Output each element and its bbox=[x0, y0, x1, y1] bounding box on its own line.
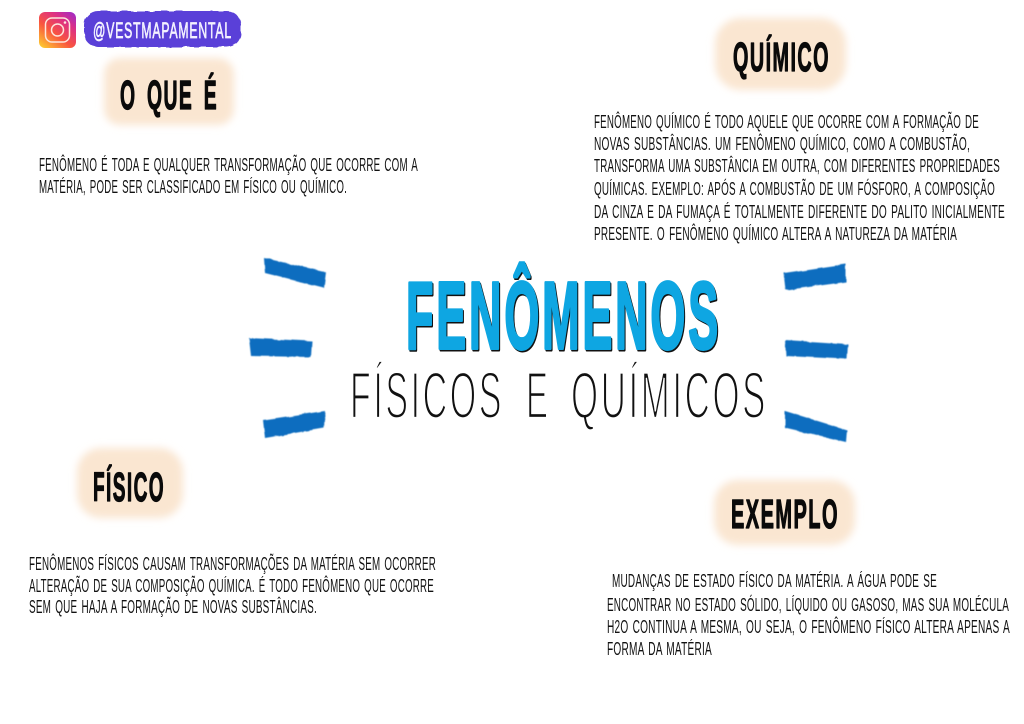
panel: químico bbox=[594, 18, 1005, 244]
text block: o que é: MATÉRIA, PODE SER CLASSIFICADO EM FÍSICO OU QUÍMICO. bbox=[39, 177, 347, 197]
icon: instagram bbox=[39, 12, 76, 48]
instagram handle badge: @VESTMAPAMENTAL bbox=[93, 18, 232, 43]
brush strokes left bbox=[249, 258, 326, 438]
heading: o que é: O QUE É bbox=[120, 72, 218, 118]
text block: físico: SEM QUE HAJA A FORMAÇÃO DE NOVAS SUBSTÂNCIAS. bbox=[29, 596, 317, 617]
panel: o que é bbox=[39, 58, 418, 197]
instagram handle badge bbox=[84, 11, 241, 47]
heading: exemplo: EXEMPLO bbox=[731, 491, 839, 537]
text block: o que é: FENÔMENO É TODA E QUALQUER TRANSFORMAÇÃO QUE OCORRE COM A bbox=[39, 154, 418, 175]
heading: físico bbox=[77, 448, 183, 518]
text block: físico bbox=[29, 553, 436, 617]
text block: exemplo: FORMA DA MATÉRIA bbox=[607, 639, 712, 659]
heading: químico: QUÍMICO bbox=[733, 34, 830, 80]
subtitle: FÍSICOS bbox=[350, 358, 504, 432]
text block: físico: ALTERAÇÃO DE SUA COMPOSIÇÃO QUÍMICA. É TODO FENÔMENO QUE OCORRE bbox=[29, 575, 434, 596]
heading: físico: FÍSICO bbox=[93, 464, 165, 510]
heading: exemplo bbox=[714, 480, 855, 545]
panel: exemplo bbox=[607, 480, 1010, 659]
subtitle: QUÍMICOS bbox=[571, 358, 768, 432]
text block: o que é bbox=[39, 154, 418, 197]
heading: o que é bbox=[104, 58, 234, 125]
text block: físico: FENÔMENOS FÍSICOS CAUSAM TRANSFORMAÇÕES DA MATÉRIA SEM OCORRER bbox=[29, 553, 436, 574]
text block: químico bbox=[594, 111, 1005, 244]
subtitle: E bbox=[526, 358, 548, 432]
panel: físico bbox=[29, 448, 436, 617]
brush strokes right bbox=[784, 264, 848, 442]
heading: químico bbox=[715, 18, 846, 90]
text block: exemplo bbox=[607, 571, 1010, 659]
main title bbox=[406, 262, 722, 371]
